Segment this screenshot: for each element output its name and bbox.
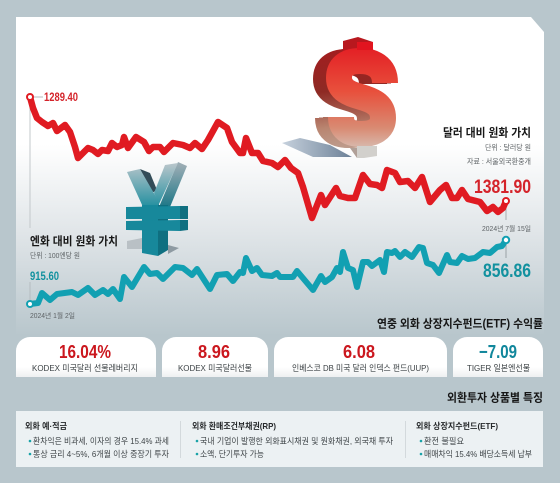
card: KODEX futures — [162, 337, 268, 377]
column: ETF — [416, 421, 532, 459]
column: deposits: 통상 금리 4~5%, 6개월 이상 중장기 투자 — [33, 449, 169, 459]
card: Invesco UUP — [274, 337, 447, 377]
teal line chart: yen vs won — [27, 237, 509, 307]
heading: product features: 외환투자 상품별 특징 — [447, 390, 543, 404]
column: ETF: 외화 상장지수펀드(ETF) — [416, 421, 498, 431]
label: end dollar value: 1381.90 — [474, 176, 531, 198]
card: KODEX leverage — [16, 337, 156, 377]
card: KODEX futures: KODEX 미국달러선물 — [178, 363, 252, 373]
source: 자료 : 서울외국환중개 — [467, 156, 531, 166]
column: deposits: 환차익은 비과세, 이자의 경우 15.4% 과세 — [33, 436, 169, 446]
card: TIGER yen: TIGER 일본엔선물 — [467, 363, 530, 373]
label: end date: 2024년 7월 15일 — [482, 224, 531, 233]
heading: dollar vs won: 달러 대비 원화 가치 — [443, 126, 531, 140]
column: RP: 외화 환매조건부채권(RP) — [192, 421, 276, 431]
card: TIGER yen: −7.09 — [479, 341, 517, 362]
column: deposits — [25, 421, 169, 459]
label: end yen value: 856.86 — [483, 260, 531, 282]
unit: dollar: 단위 : 달러당 원 — [485, 142, 531, 152]
heading: ETF returns: 연중 외화 상장지수펀드(ETF) 수익률 — [377, 316, 543, 330]
label: start yen value: 915.60 — [30, 269, 59, 283]
column: deposits: 외화 예·적금 — [25, 421, 67, 431]
panel: chart area — [16, 17, 544, 336]
panel: product features — [16, 411, 543, 467]
column: RP: 국내 기업이 발행한 외화표시채권 및 원화채권, 외국채 투자 — [200, 436, 393, 446]
column: ETF: 환전 불필요 — [424, 436, 464, 446]
card: Invesco UUP: 6.08 — [343, 341, 375, 362]
heading: yen vs won: 엔화 대비 원화 가치 — [30, 234, 118, 248]
column: ETF: 매매차익 15.4% 배당소득세 납부 — [424, 449, 532, 459]
card: Invesco UUP: 인베스코 DB 미국 달러 인덱스 펀드(UUP) — [292, 363, 429, 373]
icon: dollar sign — [282, 37, 385, 158]
red line chart: dollar vs won — [27, 94, 509, 228]
card: TIGER yen — [453, 337, 543, 377]
icon: yen sign — [126, 162, 188, 256]
label: start dollar value: 1289.40 — [44, 90, 78, 104]
label: start date: 2024년 1월 2일 — [30, 311, 75, 320]
column: RP — [192, 421, 393, 459]
card: KODEX leverage: 16.04% — [59, 341, 111, 362]
card: KODEX futures: 8.96 — [198, 341, 230, 362]
unit: yen: 단위 : 100엔당 원 — [30, 250, 80, 260]
column: RP: 소액, 단기투자 가능 — [200, 449, 264, 459]
card: KODEX leverage: KODEX 미국달러 선물레버리지 — [32, 363, 138, 373]
